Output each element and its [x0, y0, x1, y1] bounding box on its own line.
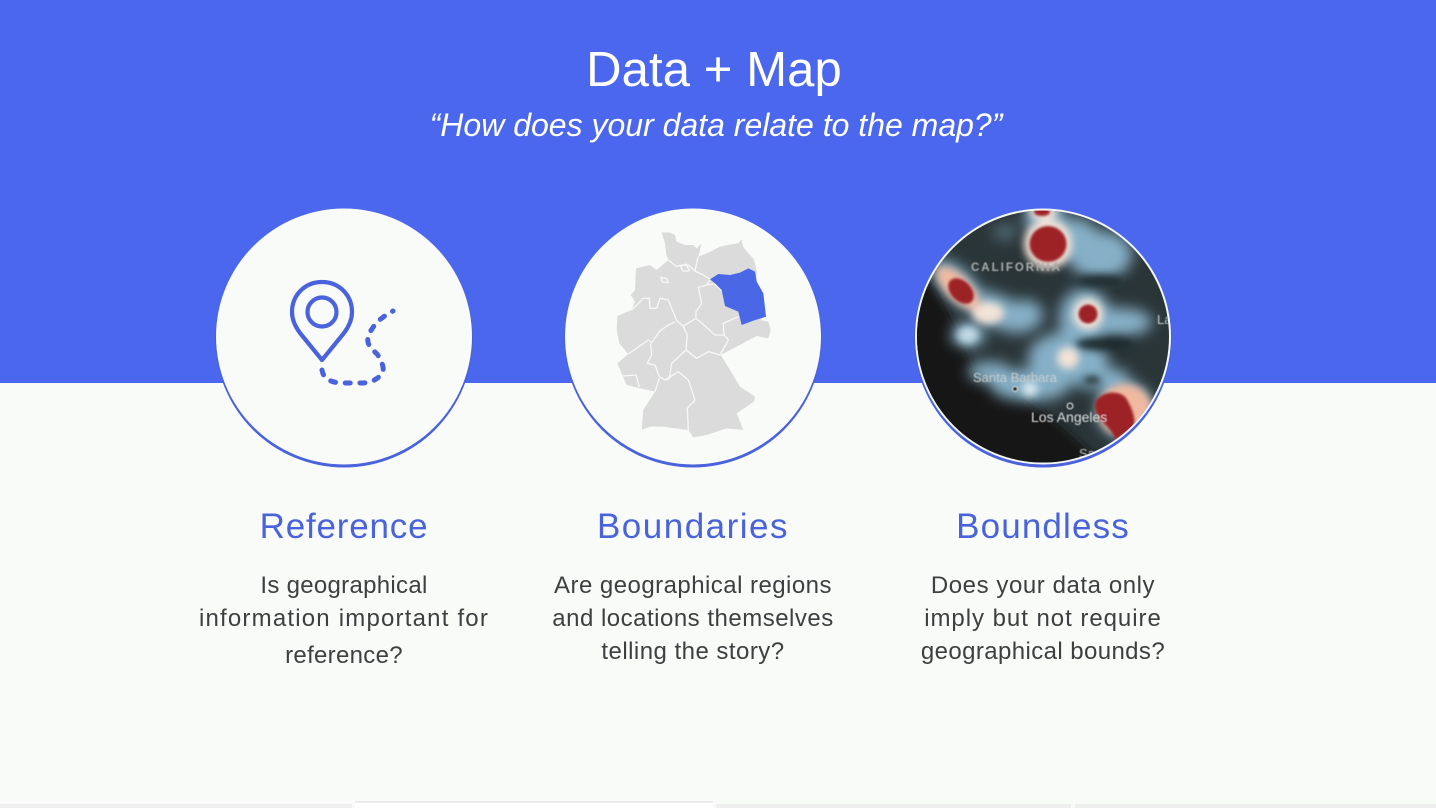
text: boundaries: and locations themselves	[552, 605, 834, 632]
text: boundaries: Are geographical regions	[554, 572, 832, 599]
column: reference	[199, 507, 489, 669]
map labels: La	[1157, 312, 1172, 327]
circle: boundless heatmap	[914, 208, 1172, 468]
text: reference: Is geographical	[260, 572, 428, 599]
heading: reference: Reference	[260, 507, 428, 546]
text: boundless: imply but not require	[924, 605, 1162, 632]
map labels: Sa	[1079, 446, 1096, 461]
column: boundaries	[552, 507, 834, 665]
text: reference	[199, 572, 489, 669]
red hot spots	[943, 208, 1135, 440]
subtitle: “How does your data relate to the map?”	[430, 107, 1002, 143]
dark coastal water	[917, 279, 1095, 462]
heading: boundless: Boundless	[956, 507, 1130, 546]
text: boundless: Does your data only	[931, 572, 1155, 599]
map of Germany with highlighted state	[617, 232, 771, 437]
column: boundless	[921, 507, 1165, 665]
map labels: CALIFORNIA	[971, 262, 1062, 274]
title: Data + Map	[586, 43, 842, 97]
text: boundless	[921, 572, 1165, 665]
heading: boundaries: Boundaries	[597, 507, 789, 546]
state borders	[623, 257, 738, 430]
map labels: Los Angeles	[1031, 409, 1107, 425]
Germany silhouette	[617, 232, 771, 437]
heat haze: blue density	[925, 198, 1153, 438]
circle: boundaries	[564, 208, 822, 468]
blue header band	[0, 0, 1436, 383]
icon: map pin with dotted route	[292, 282, 393, 383]
circle: reference	[215, 208, 473, 468]
text: reference: information important for	[199, 605, 489, 632]
map labels	[971, 262, 1172, 461]
text: boundless: geographical bounds?	[921, 638, 1165, 665]
dark gaps between heat areas	[1075, 275, 1135, 384]
highlighted state: Brandenburg	[710, 268, 766, 325]
text: reference: reference?	[285, 642, 403, 669]
text: boundaries	[552, 572, 834, 665]
map labels: Santa Barbara	[973, 370, 1058, 385]
bottom strip of tabs	[0, 801, 1436, 808]
pale hot halos	[930, 205, 1152, 436]
text: boundaries: telling the story?	[601, 638, 785, 665]
